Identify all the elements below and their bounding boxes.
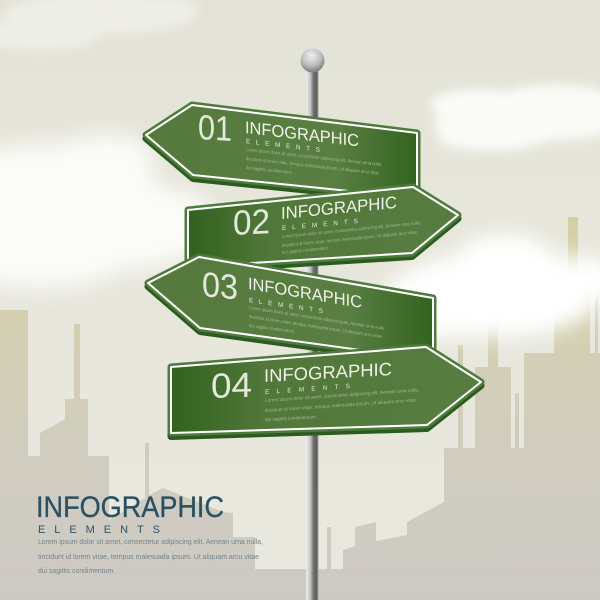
main subheading: ELEMENTS (38, 524, 160, 536)
body text 04 (265, 387, 419, 422)
body text 02: Lorem ipsum dolor sit amet, consectetur adipiscing elit. Aenean urna nulla, (282, 220, 421, 239)
number 02: 02 (233, 202, 270, 243)
subheading 01: ELEMENTS (246, 138, 321, 154)
heading 03: INFOGRAPHIC (248, 274, 362, 312)
main heading: INFOGRAPHIC (36, 491, 224, 524)
main body text: Lorem ipsum dolor sit amet, consectetur adipiscing elit. Aenean urna nulla, (38, 537, 263, 546)
body text 01 (246, 147, 382, 176)
body text 02: tincidunt id lorem vitae, tempus malesuada ipsum. Ut aliquam arcu vitae (282, 229, 417, 248)
icon: pole ball cap (300, 48, 324, 72)
heading 04: INFOGRAPHIC (264, 359, 392, 386)
number 04: 04 (211, 366, 252, 406)
heading 02: INFOGRAPHIC (281, 193, 397, 223)
number 03: 03 (202, 265, 238, 308)
main body text (38, 537, 263, 575)
pole (300, 48, 324, 600)
body text 01: dui sagittis condimentum. (246, 165, 293, 175)
sign 01 (146, 105, 417, 202)
sign 03 (148, 255, 433, 364)
subheading 02: ELEMENTS (282, 218, 359, 232)
body text 01: Lorem ipsum dolor sit amet, consectetur adipiscing elit. Aenean urna nulla, (246, 147, 382, 167)
clouds (0, 0, 600, 339)
body text 03: tincidunt id lorem vitae, tempus malesuada ipsum. Ut aliquam arcu vitae (249, 314, 382, 339)
sign 02 (188, 187, 458, 270)
body text 03: dui sagittis condimentum. (249, 323, 295, 334)
body text 04: tincidunt id lorem vitae, tempus malesuada ipsum. Ut aliquam arcu vitae (265, 397, 416, 413)
cloud: lower right (380, 234, 600, 339)
number 01: 01 (198, 108, 232, 149)
shadow cast by sign 02 (262, 255, 345, 276)
main title block (36, 491, 263, 575)
body text 02 (282, 220, 421, 255)
main body text: tincidunt id lorem vitae, tempus malesuada ipsum. Ut aliquam arcu vitae (38, 552, 259, 561)
heading 01: INFOGRAPHIC (245, 118, 359, 150)
cloud: left (0, 134, 215, 289)
city skyline (0, 217, 600, 600)
body text 03: Lorem ipsum dolor sit amet, consectetur adipiscing elit. Aenean urna nulla, (249, 305, 385, 331)
subheading 03: ELEMENTS (249, 297, 324, 315)
body text 02: dui sagittis condimentum. (282, 245, 329, 255)
body text 01: tincidunt id lorem vitae, tempus malesuada ipsum. Ut aliquam arcu vitae (246, 156, 379, 176)
cloud: top left (0, 0, 198, 50)
sign 04 (171, 347, 481, 436)
subheading 04: ELEMENTS (265, 383, 351, 396)
body text 04: dui sagittis condimentum. (265, 414, 317, 422)
main body text: dui sagittis condimentum. (38, 566, 115, 575)
cloud: top right (430, 84, 600, 151)
body text 04: Lorem ipsum dolor sit amet, consectetur adipiscing elit. Aenean urna nulla, (265, 387, 419, 403)
